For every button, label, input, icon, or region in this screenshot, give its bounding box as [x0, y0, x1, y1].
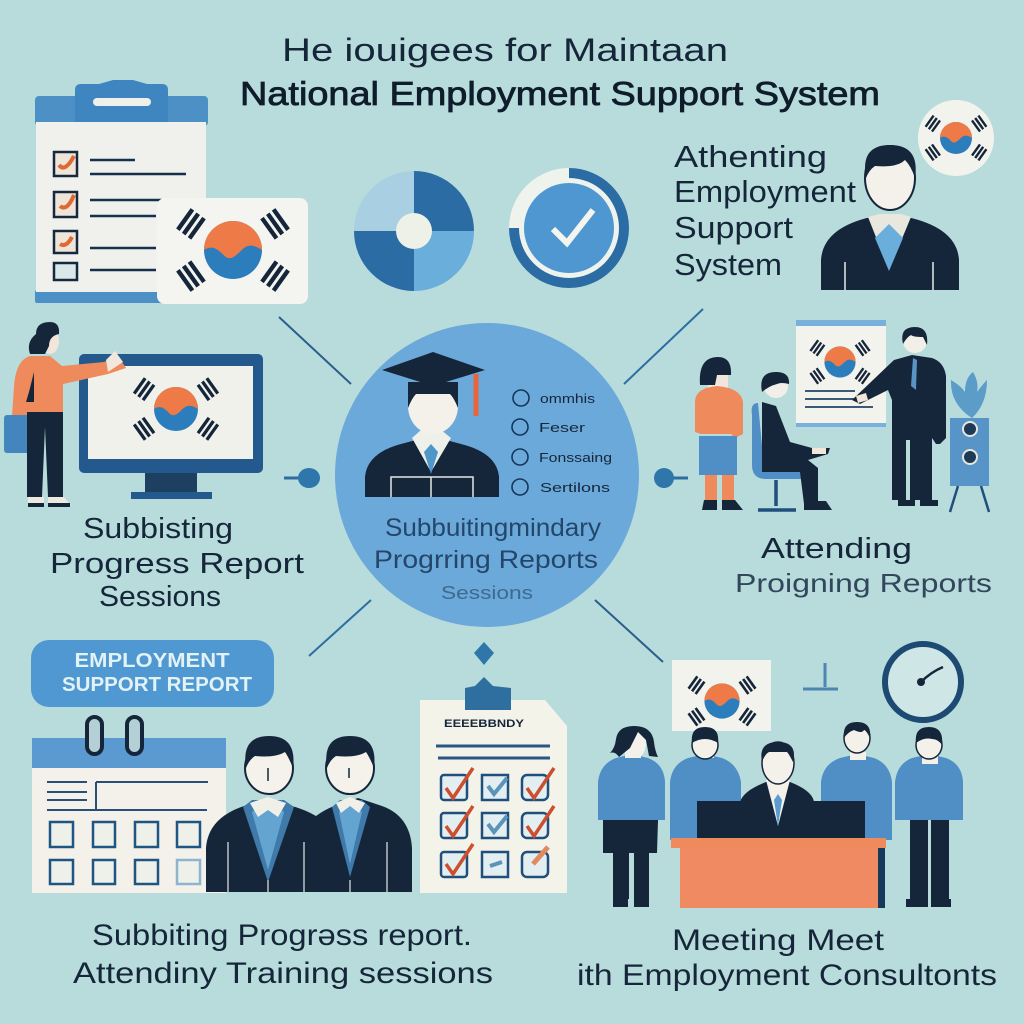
list: Fonssaing: [539, 450, 612, 465]
list: Sertilons: [540, 480, 611, 495]
icon: meeting with flag board: [695, 320, 989, 512]
badge: employment support report: SUPPORT REPORT: [62, 674, 252, 696]
text: attending employment support system: Support: [674, 210, 793, 245]
icon: woman with monitor: [4, 322, 263, 507]
icon: dot above checklist: [474, 642, 494, 665]
arrow: bottom left line: [309, 600, 371, 656]
plant stand: [950, 372, 989, 512]
seated man: [752, 372, 832, 510]
arrow: top left line: [279, 317, 351, 384]
text: attending employment support system: System: [674, 247, 782, 282]
text: left caption: [50, 513, 304, 613]
icon: checklist: EEEEBBNDY: [444, 718, 525, 730]
text: left caption: Subbisting: [83, 513, 233, 545]
text: bottom left caption: Attendiny Training sessions: [73, 957, 493, 990]
list: [512, 390, 612, 495]
text: left caption: Progress Report: [50, 548, 304, 580]
text: attending employment support system: Employment: [674, 174, 856, 209]
icon: two men in suits: [206, 736, 412, 892]
text: right caption: Attending: [761, 533, 912, 565]
arrow: top right line: [624, 309, 703, 384]
list: ommhis: [540, 391, 596, 406]
icon: clock check: [509, 168, 629, 288]
title: National Employment Support System: [240, 75, 880, 112]
text: bottom right caption: [577, 924, 997, 992]
connector dot right: [665, 476, 688, 480]
icon: gauge clock: [885, 644, 961, 720]
title: [240, 32, 880, 112]
dot right: [654, 468, 674, 488]
text: bottom right caption: ith Employment Consultonts: [577, 959, 997, 992]
text: attending employment support system: [674, 139, 856, 282]
icon: consultants at desk: [598, 722, 963, 908]
text: bottom right caption: Meeting Meet: [672, 924, 885, 957]
text: bottom left caption: Subbiting Progrəss report.: [92, 919, 472, 952]
arrow: bottom right line: [595, 600, 663, 662]
icon: man with flag bubble: [821, 100, 994, 290]
dot left: [298, 468, 320, 488]
title: He iouigees for Maintaan: [282, 32, 728, 68]
panel: central circle: [335, 323, 639, 627]
icon: small mark: [803, 663, 838, 689]
icon: checklist: [420, 677, 567, 893]
text: right caption: [735, 533, 992, 598]
text: bottom left caption: [73, 919, 493, 990]
center text: Subbuitingmindary: [385, 514, 602, 542]
text: right caption: Proigning Reports: [735, 568, 992, 598]
icon: pie chart: [354, 171, 474, 291]
text: attending employment support system: Athenting: [674, 139, 827, 174]
connector dot left: [284, 476, 304, 480]
woman: [695, 357, 743, 510]
list: Feser: [539, 420, 586, 435]
icon: flag bottom right: [672, 660, 771, 731]
text: left caption: Sessions: [99, 581, 221, 613]
icon: calendar: [32, 717, 226, 893]
badge: employment support report: [31, 640, 274, 707]
icon: graduate: [365, 352, 499, 497]
center text: Progrring Reports: [374, 546, 598, 574]
center text: [374, 514, 602, 603]
icon: checklist clipboard with flag: [35, 80, 308, 304]
badge: employment support report: EMPLOYMENT: [74, 650, 230, 672]
center text: Sessions: [441, 583, 533, 603]
standing man: [852, 327, 946, 506]
